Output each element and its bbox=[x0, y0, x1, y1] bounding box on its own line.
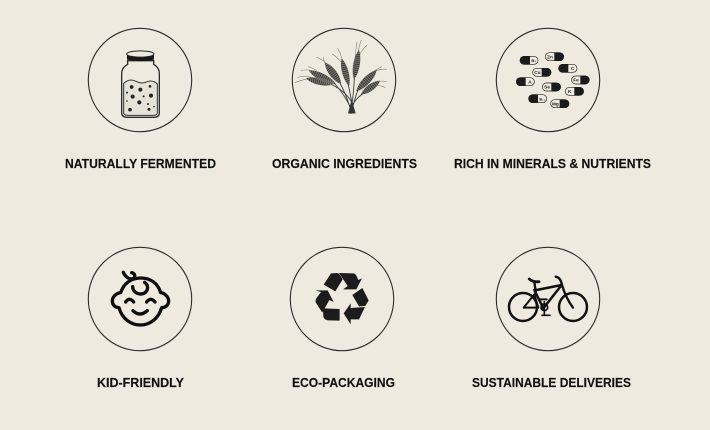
capsule: C: C bbox=[571, 66, 575, 71]
icon: capsules bbox=[516, 52, 590, 108]
panel: minerals and nutrients bbox=[454, 28, 651, 171]
circle outline: wheat bbox=[292, 28, 396, 132]
icon: baby face bbox=[112, 272, 169, 325]
capsule: K: K bbox=[568, 89, 572, 94]
icon: recycling symbol bbox=[315, 273, 369, 324]
label: minerals and nutrients: RICH IN MINERALS & NUTRIENTS bbox=[454, 157, 651, 171]
circle outline: capsules bbox=[496, 28, 600, 132]
capsule: Cu: Cu bbox=[534, 70, 541, 75]
circle outline: recycling bbox=[290, 247, 394, 351]
capsule: Fe: Fe bbox=[573, 78, 579, 83]
circle outline: bicycle bbox=[496, 247, 600, 351]
panel: sustainable deliveries bbox=[472, 247, 631, 390]
capsule: B12: B₁₂ bbox=[539, 97, 546, 101]
capsule: Mg: Mg bbox=[552, 101, 559, 106]
label: naturally fermented: NATURALLY FERMENTED bbox=[65, 157, 216, 171]
icon: jar bbox=[122, 51, 159, 117]
capsule: B1: B₁ bbox=[531, 58, 536, 63]
kernel texture bbox=[306, 50, 380, 95]
icon: bicycle bbox=[509, 277, 587, 321]
panel: kid-friendly bbox=[88, 247, 192, 390]
capsule: Zn: Zn bbox=[547, 54, 553, 59]
label: kid-friendly: KID-FRIENDLY bbox=[97, 376, 185, 390]
label: eco-packaging: ECO-PACKAGING bbox=[292, 376, 395, 390]
ears bbox=[306, 50, 380, 95]
label: sustainable deliveries: SUSTAINABLE DELIVERIES bbox=[472, 376, 631, 390]
stems bbox=[332, 78, 362, 113]
panel: organic ingredients bbox=[272, 28, 417, 171]
icon: wheat bbox=[295, 40, 387, 113]
panel: eco-packaging bbox=[290, 247, 395, 390]
panel: naturally fermented bbox=[65, 28, 216, 171]
label: organic ingredients: ORGANIC INGREDIENTS bbox=[272, 157, 417, 171]
awns bbox=[295, 40, 387, 87]
circle outline: baby bbox=[88, 247, 192, 351]
capsule: A: A bbox=[528, 79, 532, 84]
capsule: Se: Se bbox=[544, 85, 550, 90]
circle outline: jar bbox=[88, 28, 192, 132]
